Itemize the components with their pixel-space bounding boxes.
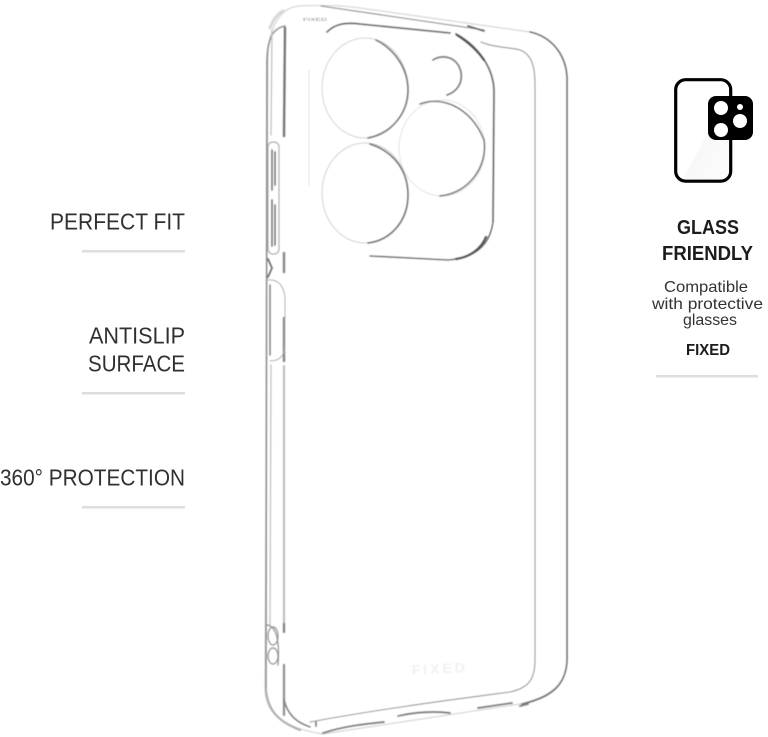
glass friendly panel: [651, 80, 763, 377]
left feature labels: [0, 208, 185, 508]
heading: glass friendly: [662, 217, 754, 265]
bottom openings: [316, 703, 528, 733]
corner flare: [270, 11, 283, 28]
case outer outline: [265, 5, 567, 734]
clear phone case: [265, 5, 567, 734]
label: perfect fit: [50, 208, 185, 252]
engraved text top: FIXED: [303, 17, 328, 22]
case top edge highlight: [321, 6, 484, 30]
icon: phone with glass and camera protector: [676, 80, 753, 181]
engraved logo: FIXED: [411, 659, 468, 678]
case left rail: [266, 26, 285, 715]
bottom left corner: [266, 690, 300, 730]
description text: glasses: [683, 312, 737, 329]
description text: [651, 279, 763, 329]
description text: with protective: [651, 296, 763, 313]
label: perfect fit: PERFECT FIT: [50, 208, 185, 234]
label: antislip surface: [82, 322, 185, 394]
label: 360 protection: 360° PROTECTION: [0, 464, 185, 490]
label: antislip surface: ANTISLIP: [89, 322, 185, 348]
camera island: [309, 23, 494, 260]
brand: fixed: FIXED: [686, 342, 730, 359]
lens 2: [399, 100, 485, 196]
bottom-left port holes: [267, 625, 279, 665]
lens 1: [322, 38, 408, 138]
heading: glass friendly: FRIENDLY: [662, 243, 754, 265]
lens 3: [322, 143, 408, 243]
case inner right line: [310, 42, 535, 722]
heading: glass friendly: GLASS: [677, 217, 739, 239]
description text: Compatible: [664, 279, 748, 296]
side buttons: [268, 142, 285, 361]
small flash lens: [433, 57, 461, 95]
case right edge highlight: [522, 32, 567, 704]
label: antislip surface: SURFACE: [88, 350, 185, 376]
